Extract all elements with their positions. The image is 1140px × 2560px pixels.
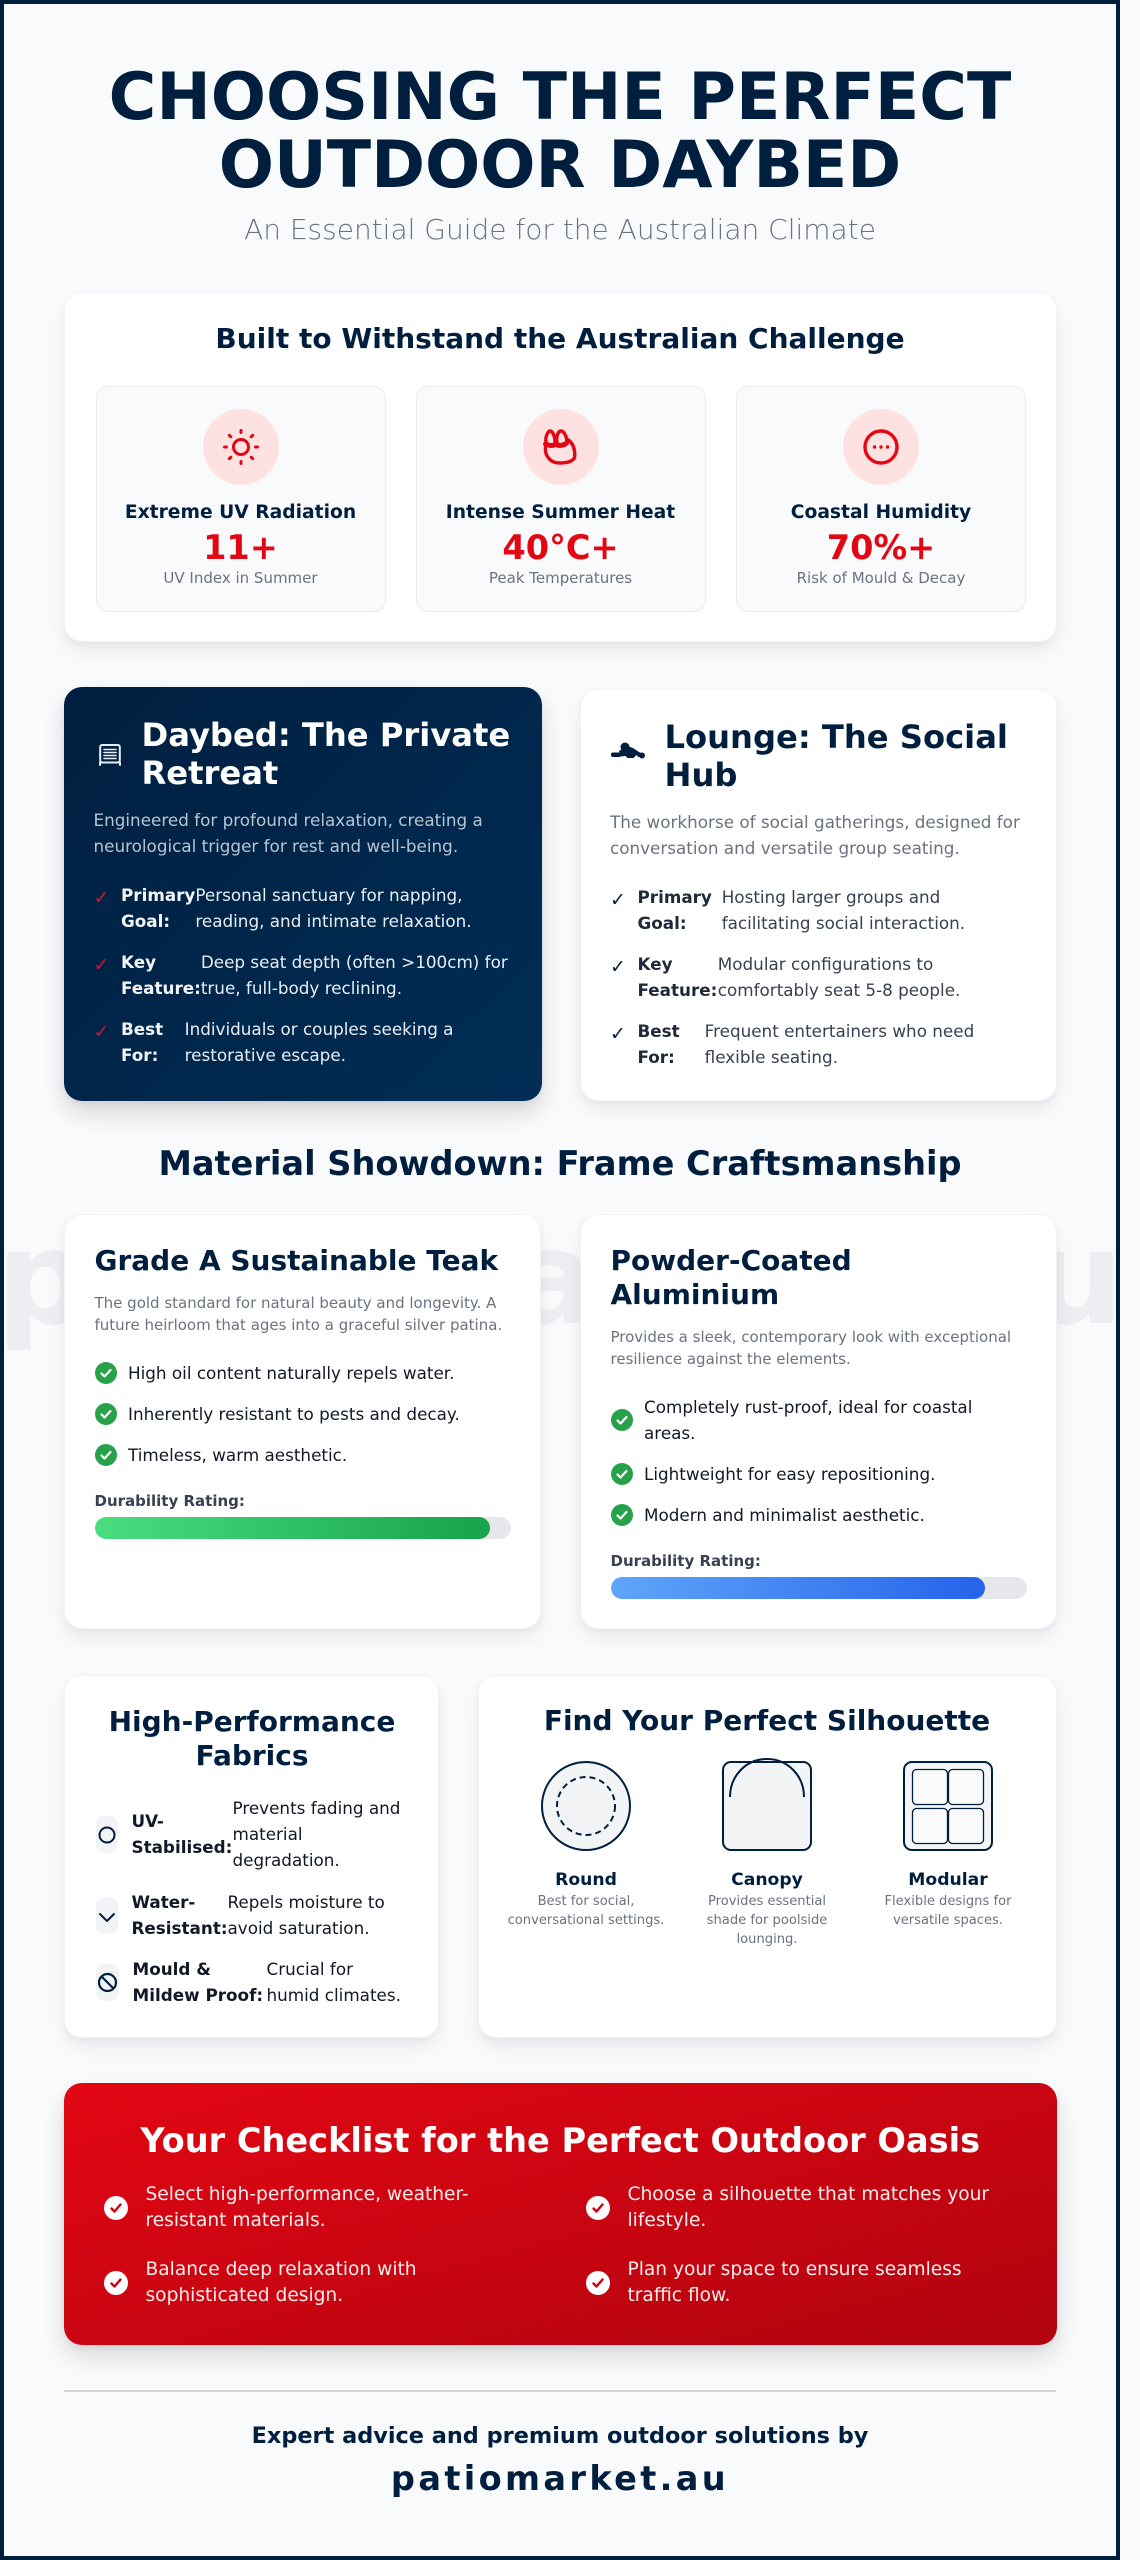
item: key feature: Key Feature: bbox=[121, 952, 201, 998]
checklist item bbox=[586, 2256, 1031, 2308]
checklist item: Balance deep relaxation with bbox=[146, 2258, 417, 2280]
subtitle: An Essential Guide for the Australian Climate bbox=[244, 213, 876, 246]
checklist item: resistant materials. bbox=[146, 2210, 326, 2231]
item: primary goal: Hosting larger groups and facilitating social interaction. bbox=[722, 886, 965, 932]
description: aluminium: resilience against the elements. bbox=[610, 1350, 851, 1368]
name: round: Round bbox=[555, 1870, 617, 1890]
description: aluminium: Provides a sleek, contemporary look with exceptional bbox=[610, 1328, 1011, 1346]
name: modular: Modular bbox=[908, 1870, 988, 1890]
item: primary goal: Primary Goal: bbox=[121, 885, 195, 931]
stat label: Intense Summer Heat bbox=[446, 502, 675, 523]
panel: daybed bbox=[64, 687, 542, 1100]
item: best for: ✓ bbox=[94, 1021, 109, 1043]
stat note: Peak Temperatures bbox=[489, 569, 632, 587]
item: primary goal: ✓ bbox=[94, 887, 109, 909]
item: key feature bbox=[610, 954, 960, 1000]
icon: round bbox=[541, 1761, 631, 1851]
note: round: Best for social, bbox=[538, 1894, 634, 1909]
checklist item bbox=[104, 2256, 549, 2308]
benefit bbox=[611, 1397, 972, 1443]
fabric: mould and mildew proof: Mould & bbox=[132, 1959, 211, 1979]
silhouette: canopy bbox=[707, 1758, 827, 1947]
note: canopy: Provides essential bbox=[708, 1894, 826, 1909]
checklist item: Choose a silhouette that matches your bbox=[628, 2184, 989, 2205]
item: best for: Individuals or couples seeking a restorative escape. bbox=[185, 1019, 453, 1065]
icon: modular bbox=[903, 1761, 993, 1851]
title bbox=[109, 60, 1011, 202]
stat value: 70%+ bbox=[827, 528, 935, 567]
footer: tagline: Expert advice and premium outdoor solutions by bbox=[252, 2423, 868, 2449]
name: canopy: Canopy bbox=[731, 1870, 803, 1890]
icon: daybed bbox=[99, 744, 121, 766]
benefit: High oil content naturally repels water. bbox=[128, 1363, 454, 1383]
panel: teak bbox=[64, 1214, 541, 1629]
heading: aluminium: Powder-Coated bbox=[610, 1244, 852, 1277]
checklist item: sophisticated design. bbox=[146, 2284, 343, 2306]
benefit: Modern and minimalist aesthetic. bbox=[644, 1505, 925, 1525]
benefit: Completely rust-proof, ideal for coastal bbox=[644, 1397, 972, 1417]
icon: canopy bbox=[722, 1758, 812, 1851]
item: primary goal: Personal sanctuary for napping, reading, and intimate relaxation. bbox=[195, 885, 472, 931]
description: lounge: The workhorse of social gatherings, designed for bbox=[610, 812, 1020, 832]
heading: lounge: Hub bbox=[664, 756, 737, 794]
list: lounge features bbox=[610, 886, 974, 1066]
description: daybed: neurological trigger for rest and well-being. bbox=[94, 836, 458, 856]
heading: challenge: Built to Withstand the Australian Challenge bbox=[215, 322, 905, 355]
note: canopy: lounging. bbox=[737, 1932, 797, 1947]
description: teak bbox=[94, 1294, 502, 1334]
heading: teak: Grade A Sustainable Teak bbox=[94, 1244, 498, 1277]
stat label: Coastal Humidity bbox=[791, 502, 971, 523]
fabric: mould and mildew proof: humid climates. bbox=[266, 1985, 401, 2005]
note: modular: Flexible designs for bbox=[884, 1894, 1011, 1909]
heading: daybed: Retreat bbox=[142, 754, 278, 792]
heading: checklist: Your Checklist for the Perfect Outdoor Oasis bbox=[140, 2121, 980, 2160]
icon: heat bbox=[522, 409, 598, 485]
description: lounge: conversation and versatile group seating. bbox=[610, 838, 960, 858]
list: fabric features bbox=[96, 1798, 401, 2005]
label: durability: Durability Rating: bbox=[94, 1492, 245, 1510]
fabric: water-resistant: Water- bbox=[132, 1892, 195, 1912]
description: aluminium bbox=[610, 1328, 1011, 1368]
checklist item: traffic flow. bbox=[628, 2284, 730, 2306]
stat value: 40°C+ bbox=[502, 528, 619, 567]
heading: lounge bbox=[664, 718, 1008, 794]
fabric: UV-stabilised: Stabilised: bbox=[132, 1837, 232, 1857]
note: modular: versatile spaces. bbox=[893, 1913, 1003, 1928]
icon: sun bbox=[202, 409, 278, 485]
heading: daybed bbox=[142, 716, 510, 792]
panel: lounge bbox=[580, 689, 1057, 1100]
description: teak: The gold standard for natural beauty and longevity. A bbox=[94, 1294, 496, 1312]
panel: silhouettes bbox=[478, 1675, 1057, 2038]
list: aluminium benefits bbox=[611, 1397, 972, 1526]
watermark: patiomarket.au: patiomarket.au bbox=[0, 1202, 1120, 1354]
description: lounge bbox=[610, 812, 1020, 858]
item: primary goal: Primary Goal: bbox=[638, 886, 712, 932]
note: canopy: shade for poolside bbox=[707, 1913, 827, 1928]
benefit: Timeless, warm aesthetic. bbox=[128, 1445, 347, 1465]
title: CHOOSING THE PERFECT bbox=[109, 60, 1011, 135]
heading: material showdown: Material Showdown: Frame Craftsmanship bbox=[158, 1144, 962, 1183]
fabric: UV-stabilised: material bbox=[232, 1824, 303, 1844]
checklist item: lifestyle. bbox=[628, 2210, 706, 2231]
item: key feature: Deep seat depth (often >100cm) for true, full-body reclining. bbox=[201, 952, 508, 998]
item: key feature: Modular configurations to comfortably seat 5-8 people. bbox=[718, 954, 960, 1000]
checklist item: Plan your space to ensure seamless bbox=[628, 2258, 962, 2280]
heading: aluminium: Aluminium bbox=[610, 1278, 779, 1311]
panel: checklist bbox=[64, 2083, 1057, 2345]
fabric: mould and mildew proof: Crucial for bbox=[266, 1959, 353, 1979]
description: teak: future heirloom that ages into a graceful silver patina. bbox=[94, 1316, 502, 1334]
fabric: UV-stabilised: Prevents fading and bbox=[232, 1798, 400, 1818]
fabric: mould and mildew proof: Mildew Proof: bbox=[132, 1985, 263, 2005]
silhouette: round bbox=[508, 1761, 664, 1928]
fabric: water-resistant: Repels moisture to bbox=[228, 1892, 385, 1912]
description: daybed: Engineered for profound relaxation, creating a bbox=[94, 810, 483, 830]
description: daybed bbox=[94, 810, 483, 856]
note: modular bbox=[884, 1894, 1012, 1928]
benefit: Lightweight for easy repositioning. bbox=[644, 1464, 935, 1484]
item: best for: Best For: bbox=[121, 1019, 163, 1065]
panel: fabrics bbox=[64, 1675, 438, 2038]
checklist item bbox=[586, 2182, 1031, 2234]
stat note: UV Index in Summer bbox=[163, 569, 318, 587]
item: key feature: ✓ bbox=[610, 956, 626, 978]
fabric: mould and mildew proof bbox=[96, 1959, 401, 2005]
title: OUTDOOR DAYBED bbox=[219, 128, 901, 202]
bar: teak durability bbox=[94, 1517, 510, 1539]
fabric: UV-stabilised: degradation. bbox=[232, 1850, 340, 1870]
footer: brand: patiomarket.au bbox=[391, 2459, 729, 2498]
label: durability: Durability Rating: bbox=[610, 1552, 761, 1570]
item: key feature: ✓ bbox=[94, 954, 109, 976]
stat label: Extreme UV Radiation bbox=[125, 502, 356, 523]
stat card: UV radiation bbox=[96, 386, 386, 612]
item: best for: Best For: bbox=[638, 1020, 680, 1066]
benefit: Inherently resistant to pests and decay. bbox=[128, 1404, 460, 1424]
stat value: 11+ bbox=[203, 528, 278, 567]
panel: aluminium bbox=[580, 1214, 1057, 1629]
heading: silhouettes: Find Your Perfect Silhouette bbox=[544, 1704, 990, 1737]
item: primary goal bbox=[610, 886, 965, 932]
fabric: UV-stabilised: UV- bbox=[132, 1811, 164, 1831]
bar: aluminium durability bbox=[610, 1577, 1026, 1599]
list: teak benefits bbox=[95, 1362, 460, 1466]
note: canopy bbox=[707, 1894, 827, 1947]
heading: fabrics bbox=[109, 1705, 395, 1772]
fabric: water-resistant: Resistant: bbox=[132, 1918, 228, 1938]
stat card: summer heat bbox=[416, 386, 706, 612]
stat note: Risk of Mould & Decay bbox=[797, 569, 965, 587]
item: best for: Frequent entertainers who need flexible seating. bbox=[705, 1020, 974, 1066]
note: round bbox=[508, 1894, 664, 1928]
note: round: conversational settings. bbox=[508, 1913, 664, 1928]
panel: Australian challenge bbox=[64, 292, 1057, 642]
fabric: water-resistant: avoid saturation. bbox=[228, 1918, 370, 1938]
fabric: water-resistant bbox=[96, 1892, 385, 1938]
checklist item bbox=[104, 2182, 549, 2234]
checklist item: Select high-performance, weather- bbox=[146, 2184, 469, 2205]
heading: daybed: Daybed: The Private bbox=[142, 716, 510, 754]
silhouette: modular bbox=[884, 1761, 1012, 1928]
fabric: UV-stabilised bbox=[96, 1798, 400, 1870]
icon: humidity bbox=[843, 409, 919, 485]
heading: fabrics: High-Performance bbox=[109, 1705, 395, 1738]
benefit: areas. bbox=[644, 1423, 696, 1443]
item: best for: ✓ bbox=[610, 1022, 626, 1044]
item: primary goal: ✓ bbox=[610, 888, 626, 910]
heading: lounge: Lounge: The Social bbox=[664, 718, 1008, 756]
heading: aluminium bbox=[610, 1244, 852, 1311]
item: key feature: Key Feature: bbox=[638, 954, 717, 1000]
icon: lounge bbox=[611, 742, 645, 758]
heading: fabrics: Fabrics bbox=[195, 1739, 309, 1772]
stat card: coastal humidity bbox=[736, 386, 1026, 612]
list: daybed features bbox=[94, 885, 508, 1065]
